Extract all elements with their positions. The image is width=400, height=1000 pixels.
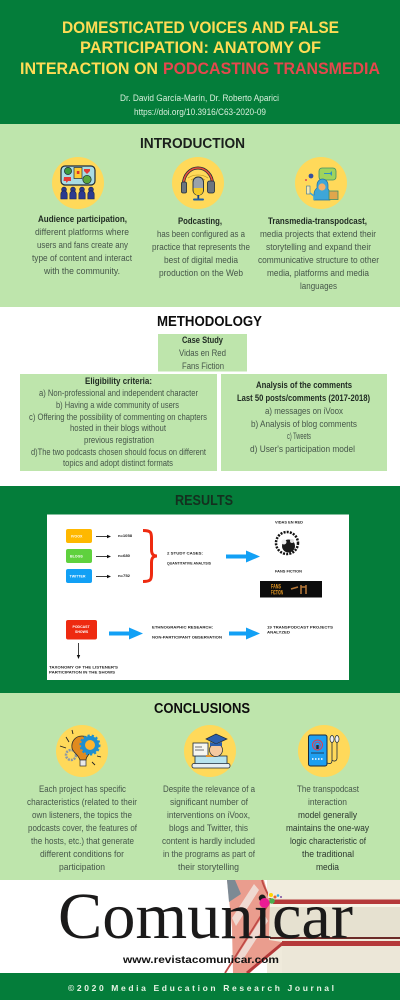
text: third conclusion: model generally <box>298 810 357 821</box>
text: first conclusion: different conditions for <box>40 849 125 860</box>
panel: methodology <box>0 307 400 486</box>
authors and doi <box>120 93 279 117</box>
blogs row <box>66 549 130 563</box>
box: case study: Case Study <box>182 335 224 346</box>
label: ethnographic research: NON-PARTICIPANT OBSERVATION <box>152 636 222 640</box>
label: taxonomy <box>49 666 119 674</box>
text: first conclusion: the hosts, etc.) that generate <box>31 836 134 847</box>
title <box>20 19 380 78</box>
logo: comunicar: Comunicar <box>58 880 353 953</box>
blogs row: BLOGS <box>70 554 83 558</box>
ivoox row <box>66 529 132 543</box>
panel: comunicar banner <box>0 880 400 973</box>
panel: conclusions <box>0 693 400 880</box>
label: taxonomy: PARTICIPATION IN THE SHOWS <box>49 670 116 674</box>
label: study cases <box>167 552 211 566</box>
text: third conclusion <box>286 784 369 873</box>
text: first conclusion <box>27 784 138 873</box>
arrow: to cases <box>226 550 260 562</box>
authors and doi: https://doi.org/10.3916/C63-2020-09 <box>134 107 266 117</box>
text: podcasting: has been configured as a <box>157 229 246 240</box>
text: third conclusion: interaction <box>308 797 347 808</box>
box: analysis of the comments: c) Tweets <box>287 431 311 442</box>
text: audience participation: with the community. <box>43 266 120 277</box>
heading: conclusions: CONCLUSIONS <box>154 701 250 717</box>
box: analysis of the comments <box>221 374 387 471</box>
logo: fans fiction: FICTION <box>271 590 283 596</box>
label: taxonomy: TAXONOMY OF THE LISTENER'S <box>49 666 119 670</box>
box: analysis of the comments: a) messages on iVoox <box>265 406 343 417</box>
text: transmedia-transpodcast: Transmedia-transpodcast, <box>268 216 367 227</box>
heading: results: RESULTS <box>175 493 233 509</box>
text: second conclusion <box>162 784 256 873</box>
logo: fans fiction: FANS <box>271 584 281 590</box>
text: first conclusion: participation <box>59 862 105 873</box>
box: eligibility criteria: hosted in their blogs without <box>70 423 166 433</box>
text: transmedia-transpodcast: communicative structure to other <box>258 255 380 266</box>
label: ethnographic research: ETHNOGRAPHIC RESEARCH: <box>152 626 213 630</box>
icon: bulb and gears <box>56 725 108 777</box>
twitter row: n=752 <box>118 574 130 578</box>
red brace <box>143 530 157 582</box>
box: analysis of the comments: d) User's participation model <box>250 444 355 455</box>
logo: fans fiction <box>260 581 322 598</box>
text: first conclusion: podcasts cover, the features of <box>28 823 137 834</box>
header panel <box>0 0 400 125</box>
text: third conclusion: The transpodcast <box>297 784 359 795</box>
text: second conclusion: content is hardly included <box>162 836 255 847</box>
box: eligibility criteria: d)The two podcasts chosen should focus on different <box>31 447 206 457</box>
text: second conclusion: in the programs as part of <box>163 849 255 860</box>
text: second conclusion: their storytelling <box>178 862 239 873</box>
text: first conclusion: characteristics (related to their <box>27 797 138 808</box>
ivoox row: IVOOX <box>71 534 83 538</box>
box: eligibility criteria <box>20 374 217 471</box>
arrow: to projects <box>229 628 260 640</box>
label: transpodcast projects: ANALYZED <box>267 630 290 634</box>
title: PODCASTING TRANSMEDIA <box>163 60 380 78</box>
box: podcast shows: SHOWS <box>75 630 89 634</box>
box: case study <box>158 334 247 372</box>
box: analysis of the comments: b) Analysis of blog comments <box>251 419 357 430</box>
arrow: to ethnographic research <box>109 628 143 640</box>
label: study cases: QUANTITATIVE ANALYSIS <box>167 562 211 566</box>
panel: introduction <box>0 124 400 307</box>
arrow: down to taxonomy <box>77 643 80 659</box>
label: vidas en red: VIDAS EN RED <box>275 520 303 524</box>
label: study cases: 2 STUDY CASES: <box>167 552 203 556</box>
text: audience participation <box>32 214 132 277</box>
text: second conclusion: blogs and Twitter, this <box>169 823 248 834</box>
text: third conclusion: media <box>316 862 340 873</box>
text: audience participation: different platforms where <box>35 227 129 238</box>
twitter row: TWITTER <box>70 574 86 578</box>
box: podcast shows <box>66 620 97 640</box>
box: case study: Vidas en Red <box>179 348 226 359</box>
text: podcasting: production on the Web <box>159 268 243 279</box>
text: transmedia-transpodcast: media, platforms and media <box>267 268 370 279</box>
box: eligibility criteria: topics and adopt distinct formats <box>63 458 174 468</box>
text: second conclusion: significant number of <box>170 797 248 808</box>
panel: results <box>0 486 400 693</box>
text: third conclusion: the traditional <box>302 849 354 860</box>
text: podcasting: best of digital media <box>164 255 239 266</box>
title: DOMESTICATED VOICES AND FALSE <box>62 19 339 37</box>
icon: podcast on phone <box>298 725 350 777</box>
text: audience participation: type of content and interact <box>32 253 132 264</box>
heading: introduction: INTRODUCTION <box>140 136 245 152</box>
text: transmedia-transpodcast: storytelling and expand their <box>266 242 372 253</box>
authors and doi: Dr. David García-Marín, Dr. Roberto Aparici <box>120 93 279 103</box>
label: transpodcast projects <box>267 626 334 634</box>
flow diagram <box>47 514 349 680</box>
text: audience participation: users and fans create any <box>37 240 128 251</box>
icon: podcast microphone <box>172 157 224 209</box>
text: audience participation: Audience participation, <box>38 214 127 225</box>
text: second conclusion: Despite the relevance of a <box>163 784 256 795</box>
title: INTERACTION ON <box>20 60 158 78</box>
text: third conclusion: logic characteristic of <box>290 836 366 847</box>
text: first conclusion: Each project has specific <box>39 784 126 795</box>
photo: stack of books <box>225 880 400 973</box>
logo: vidas en red <box>276 532 298 554</box>
text: podcasting: practice that represents the <box>152 242 250 253</box>
box: case study: Fans Fiction <box>182 361 224 372</box>
label: fans fiction: FANS FICTION <box>275 570 302 574</box>
url: www.revistacomunicar.com <box>122 954 279 966</box>
footer <box>0 973 400 1000</box>
icon: graduate on laptop <box>184 725 236 777</box>
label: transpodcast projects: 19 TRANSPODCAST PROJECTS <box>267 626 334 630</box>
title: PARTICIPATION: ANATOMY OF <box>80 39 321 57</box>
label: ethnographic research <box>152 626 222 640</box>
text: transmedia-transpodcast: languages <box>300 281 337 292</box>
box: eligibility criteria: b) Having a wide community of users <box>56 400 180 410</box>
box: eligibility criteria: c) Offering the possibility of commenting on chapters <box>29 412 208 422</box>
text: transmedia-transpodcast: media projects that extend their <box>260 229 377 240</box>
text: third conclusion: maintains the one-way <box>286 823 369 834</box>
text: podcasting <box>152 216 250 279</box>
box: analysis of the comments: Analysis of the comments <box>256 380 352 391</box>
blogs row: n=680 <box>118 554 130 558</box>
box: eligibility criteria: Eligibility criteria: <box>85 376 152 387</box>
text: first conclusion: own listeners, the topics the <box>32 810 132 821</box>
icon: transmedia person <box>295 157 347 209</box>
box: eligibility criteria: a) Non-professional and independent character <box>39 388 198 398</box>
box: podcast shows: PODCAST <box>72 625 90 629</box>
box: analysis of the comments: Last 50 posts/comments (2017-2018) <box>237 393 370 404</box>
ivoox row: n=1058 <box>118 534 132 538</box>
heading: methodology: METHODOLOGY <box>157 314 262 330</box>
text: second conclusion: interventions on iVoox, <box>167 810 250 821</box>
box: eligibility criteria: previous registration <box>84 435 154 445</box>
footer text: ©2020 Media Education Research Journal <box>68 983 334 993</box>
icon: audience screen <box>52 157 104 209</box>
text: podcasting: Podcasting, <box>178 216 222 227</box>
twitter row <box>66 569 130 583</box>
text: transmedia-transpodcast <box>258 216 380 292</box>
